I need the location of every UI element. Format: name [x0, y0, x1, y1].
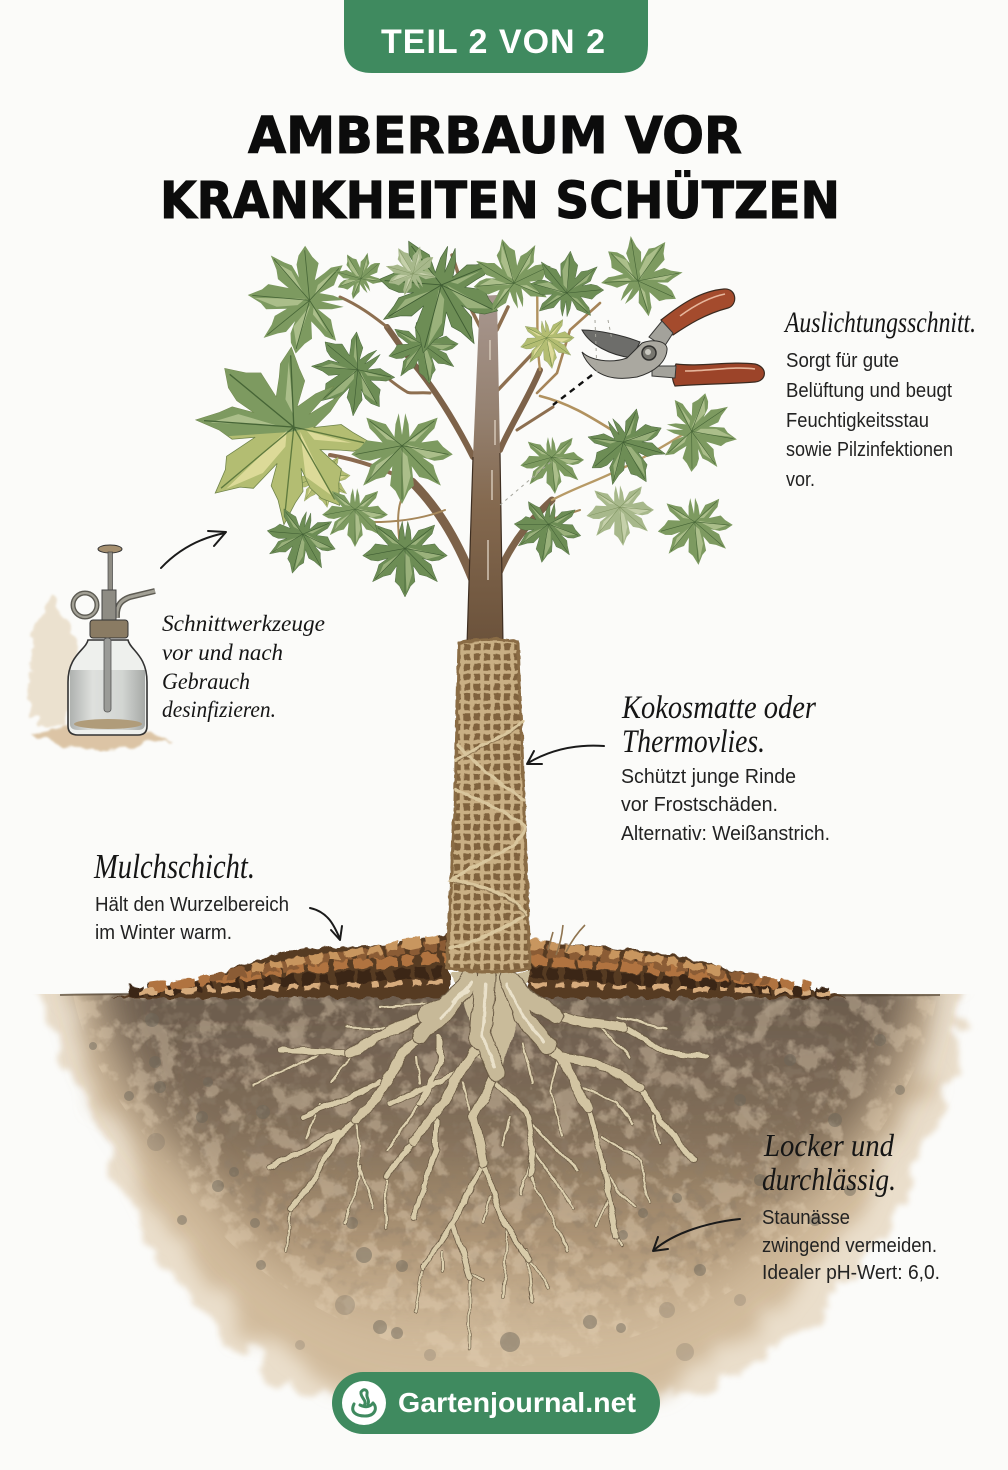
disinfect note: vor und nach [162, 640, 283, 665]
pruning callout: sowie Pilzinfektionen [786, 439, 953, 461]
trunk wrap callout [621, 690, 830, 845]
pruning callout: vor. [786, 469, 815, 491]
trunk wrap callout: Alternativ: Weißanstrich. [621, 823, 830, 845]
disinfect note: Schnittwerkzeuge [162, 611, 325, 636]
mulch callout: im Winter warm. [95, 922, 232, 944]
mulch callout: Mulchschicht. [93, 847, 255, 886]
pruning callout: Feuchtigkeitsstau [786, 410, 929, 432]
mulch callout: Hält den Wurzelbereich [95, 894, 289, 916]
mulch layer [110, 925, 850, 998]
header tab: TEIL 2 VON 2 [381, 23, 605, 61]
disinfect note [162, 611, 325, 722]
dashed cut line [500, 320, 612, 505]
footer badge [332, 1372, 660, 1434]
footer badge: Gartenjournal.net [398, 1387, 636, 1418]
soil callout: Idealer pH-Wert: 6,0. [762, 1262, 940, 1284]
arrow: wrap callout to trunk [527, 746, 604, 764]
trunk wrap callout: Kokosmatte oder [621, 690, 816, 726]
icon: sprout logo [342, 1381, 386, 1425]
soil callout: zwingend vermeiden. [762, 1235, 937, 1257]
pruning callout [783, 306, 976, 491]
arrow: spray to foliage [161, 531, 226, 568]
icon: spray bottle [28, 545, 172, 748]
soil callout [762, 1127, 940, 1284]
burlap trunk wrap [447, 639, 530, 972]
soil callout: durchlässig. [762, 1161, 896, 1197]
icon: pruning shears [582, 289, 764, 386]
disinfect note: Gebrauch [162, 669, 250, 694]
arrow: mulch callout to mulch [310, 908, 342, 940]
trunk wrap callout: Schützt junge Rinde [621, 766, 796, 788]
soil callout: Locker und [763, 1127, 895, 1163]
soil pebbles [89, 1013, 905, 1361]
pruning callout: Belüftung und beugt [786, 380, 952, 402]
roots [253, 972, 707, 1350]
soil cross-section [46, 950, 962, 1395]
soil callout: Staunässe [762, 1207, 850, 1229]
tree branches [315, 255, 690, 580]
pruning callout: Sorgt für gute [786, 350, 899, 372]
title: KRANKHEITEN SCHÜTZEN [160, 169, 840, 231]
title: AMBERBAUM VOR [248, 107, 742, 166]
tree trunk [467, 295, 503, 645]
title [160, 107, 840, 231]
arrow: soil callout to soil [653, 1219, 740, 1251]
trunk wrap callout: Thermovlies. [622, 724, 765, 760]
header tab [344, 0, 648, 73]
tree foliage [195, 236, 737, 597]
disinfect note: desinfizieren. [162, 697, 276, 722]
trunk wrap callout: vor Frostschäden. [621, 794, 778, 816]
mulch callout [93, 847, 289, 944]
